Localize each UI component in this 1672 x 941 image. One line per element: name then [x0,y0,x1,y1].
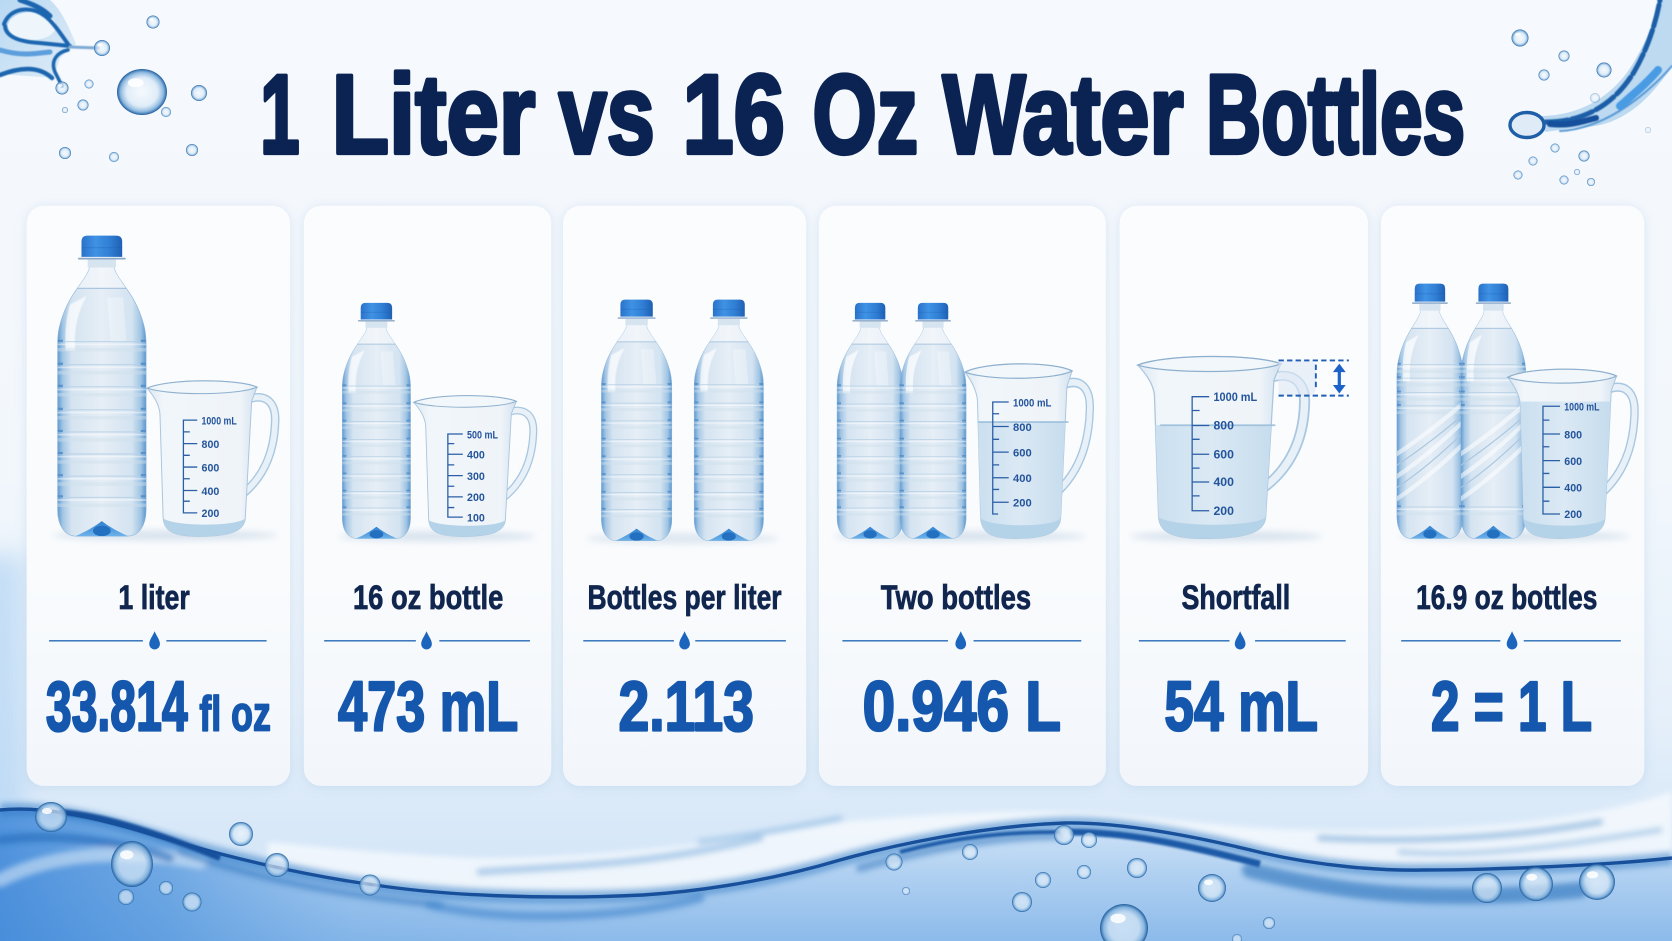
title: vs [559,52,655,177]
icon: right bottle [694,300,763,541]
icon: left bottle [601,300,672,541]
icon: measuring jug 1000 mL: 800 [202,439,219,451]
callout: 54 mL gap marker [1279,360,1349,396]
icon: right bottle [900,303,966,538]
icon: measuring jug with shortfall: 1000 mL [1213,390,1258,404]
panel: 16 oz bottle [304,206,551,786]
icon: measuring jug at 946 mL: 1000 mL [1013,397,1052,409]
icon: measuring jug full to 1 L: 600 [1564,456,1582,468]
title: Liter [332,52,535,177]
value: 2 = 1 L [1431,666,1592,745]
icon: measuring jug 500 mL: 300 [467,471,485,483]
panel: shortfall [1120,206,1368,786]
icon: measuring jug 1000 mL: 400 [202,486,219,498]
water wave footer [0,792,1672,941]
divider with drop [842,631,1081,649]
label: 16 oz bottle [353,579,503,617]
icon: left bottle [1394,284,1466,539]
water splash: top left [0,0,207,162]
value: 54 mL [1164,666,1318,745]
value: 473 mL [338,666,518,745]
title [260,52,1465,177]
icon: measuring jug at 946 mL [965,364,1090,542]
icon: measuring jug at 946 mL: 800 [1013,422,1032,434]
divider with drop [1401,631,1621,649]
value: 33.814 [46,666,188,745]
title: Bottles [1206,52,1465,177]
icon: measuring jug 1000 mL: 200 [202,508,219,520]
value: 2.113 [618,666,754,745]
icon: measuring jug with shortfall: 600 [1213,448,1234,462]
icon: measuring jug with shortfall: 400 [1213,475,1234,489]
label: 1 liter [118,579,190,617]
panel: 16.9 oz bottles [1381,206,1644,786]
icon: measuring jug full to 1 L [1508,369,1635,541]
panel: 1 liter [27,206,290,786]
panel: bottles per liter [563,206,806,786]
icon: measuring jug with shortfall: 200 [1213,504,1234,518]
icon: measuring jug 500 mL [414,396,533,536]
icon: measuring jug full to 1 L: 1000 mL [1564,402,1600,414]
label: 16.9 oz bottles [1416,579,1597,617]
value: fl oz [199,687,271,741]
divider with drop [1139,631,1346,649]
icon: measuring jug at 946 mL: 400 [1013,473,1032,485]
icon: measuring jug 1000 mL: 600 [202,462,219,474]
value: 0.946 L [863,666,1061,745]
icon: measuring jug 1000 mL [147,381,275,536]
icon: measuring jug 1000 mL: 1000 mL [202,415,237,427]
icon: measuring jug 500 mL: 500 mL [467,429,498,441]
title: Oz [813,52,918,177]
icon: measuring jug full to 1 L: 200 [1564,509,1582,521]
title: 16 [682,52,785,177]
divider with drop [324,631,530,649]
panel: two bottles [819,206,1106,786]
label: Bottles per liter [588,579,782,617]
icon: measuring jug at 946 mL: 600 [1013,447,1032,459]
label: Shortfall [1181,579,1290,617]
icon: left bottle [837,303,903,538]
icon: measuring jug with shortfall [1138,356,1305,543]
divider with drop [583,631,786,649]
water splash: top right [1510,0,1672,186]
title: Water [943,52,1184,177]
divider with drop [49,631,267,649]
icon: 16 oz bottle [342,303,411,538]
icon: measuring jug 500 mL: 100 [467,512,485,524]
label: Two bottles [881,579,1031,617]
icon: measuring jug 500 mL: 400 [467,450,485,462]
icon: measuring jug full to 1 L: 800 [1564,429,1582,441]
icon: measuring jug full to 1 L: 400 [1564,483,1582,495]
icon: 1 liter bottle [58,236,146,536]
icon: measuring jug with shortfall: 800 [1213,419,1234,433]
icon: right bottle [1458,284,1529,539]
title: 1 [260,52,300,177]
icon: measuring jug at 946 mL: 200 [1013,498,1032,510]
icon: measuring jug 500 mL: 200 [467,492,485,504]
